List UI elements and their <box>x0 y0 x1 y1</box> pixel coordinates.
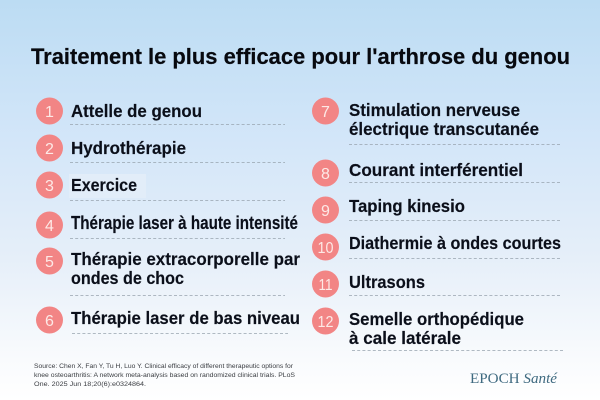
source citation: Source: Chen X, Fan Y, Tu H, Luo Y. Clinical efficacy of different therapeutic options for <box>34 363 294 370</box>
item 11: 11 <box>318 277 333 294</box>
item 8 <box>312 160 562 186</box>
item 8: Courant interférentiel <box>349 160 523 180</box>
item 5: ondes de choc <box>71 268 184 288</box>
item 5: 5 <box>45 254 54 271</box>
item 9: Taping kinesio <box>349 196 465 216</box>
item 10 <box>312 233 562 260</box>
item 3: Exercice <box>71 175 137 195</box>
item 4: Thérapie laser à haute intensité <box>71 212 298 233</box>
item 2: Hydrothérapie <box>71 138 186 158</box>
item 12: 12 <box>318 314 334 331</box>
item 12 <box>312 308 565 350</box>
item 9: 9 <box>321 203 330 220</box>
item 6: 6 <box>45 313 54 330</box>
source citation: One. 2025 Jun 18;20(6):e0324864. <box>34 381 146 388</box>
item 11 <box>312 270 562 298</box>
item 1 <box>36 98 285 124</box>
item 3: 3 <box>45 178 54 195</box>
item 9 <box>312 196 562 224</box>
logo: EPOCH Santé: EPOCH Santé <box>470 371 558 387</box>
item 2 <box>36 134 285 162</box>
item 7 <box>312 98 562 144</box>
item 7: Stimulation nerveuse <box>349 100 520 120</box>
title: Traitement le plus efficace pour l'arthrose du genou <box>31 44 570 69</box>
item 4: 4 <box>45 218 54 235</box>
item 1: 1 <box>45 104 54 121</box>
item 2: 2 <box>45 141 54 158</box>
item 5 <box>36 248 300 296</box>
item 4 <box>36 212 298 238</box>
item 3 <box>36 172 285 200</box>
item 1: Attelle de genou <box>71 101 202 121</box>
source citation: knee osteoarthritis: A network meta-analysis based on randomized clinical trials. PLoS <box>34 372 295 379</box>
item 7: 7 <box>321 104 330 121</box>
item 7: électrique transcutanée <box>349 119 539 139</box>
item 11: Ultrasons <box>349 272 425 292</box>
item 6 <box>36 306 300 334</box>
item 8: 8 <box>321 166 330 183</box>
item 10: 10 <box>318 240 334 257</box>
item 10: Diathermie à ondes courtes <box>349 233 561 253</box>
item 5: Thérapie extracorporelle par <box>71 249 300 269</box>
item 12: à cale latérale <box>349 328 461 348</box>
item 6: Thérapie laser de bas niveau <box>71 308 300 328</box>
item 12: Semelle orthopédique <box>349 309 524 329</box>
source citation <box>34 363 295 388</box>
